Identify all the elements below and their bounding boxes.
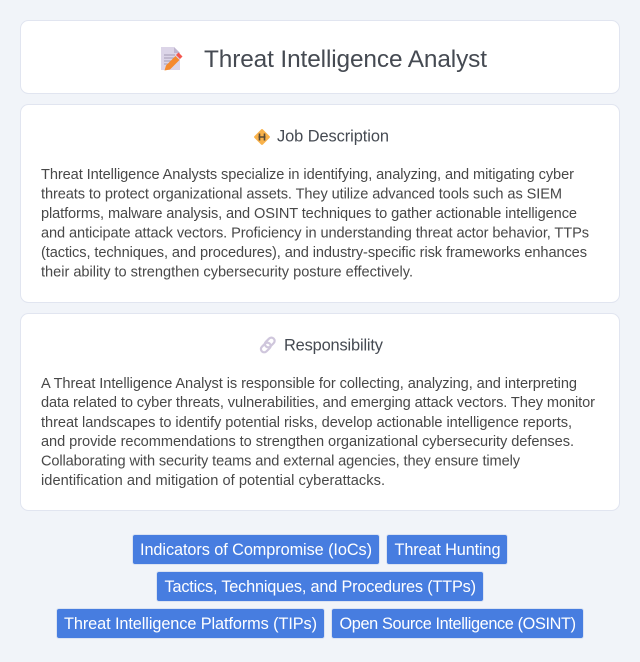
panel: job description: [20, 104, 620, 302]
text block: job description: (tactics, techniques, and procedures), and industry-specific risk frameworks enhances: [41, 245, 587, 261]
panel: header: [20, 20, 620, 94]
tag: threat hunting: [386, 534, 508, 564]
text block: job description: [41, 167, 589, 280]
tag: threat intelligence platforms: Threat Intelligence Platforms (TIPs): [64, 615, 317, 633]
tag: open source intelligence: [332, 608, 584, 638]
text block: job description: their ability to strengthen cybersecurity posture effectively.: [41, 264, 413, 280]
heading: job description: Job Description: [277, 128, 389, 146]
tag: tactics, techniques, and procedures: Tactics, Techniques, and Procedures (TTPs): [164, 578, 476, 596]
tag list: [56, 534, 584, 638]
text block: responsibility: threat landscapes to identify potential risks, develop actionable intelligence reports,: [41, 415, 572, 431]
tag: open source intelligence: Open Source Intelligence (OSINT): [340, 615, 576, 633]
text block: responsibility: Collaborating with security teams and external agencies, they ensure timely: [41, 454, 521, 470]
icon: chain link: [260, 336, 276, 354]
tag: tactics, techniques, and procedures: [156, 572, 484, 602]
icon: document with pencil: [161, 47, 182, 70]
tag: indicators of compromise: Indicators of Compromise (IoCs): [140, 541, 372, 559]
text block: responsibility: [41, 376, 595, 489]
text block: job description: Threat Intelligence Analysts specialize in identifying, analyzing, and mitigating cyber: [41, 167, 574, 183]
tag: indicators of compromise: [132, 534, 380, 564]
text block: responsibility: data related to cyber threats, vulnerabilities, and emerging attack vectors. They monitor: [41, 395, 595, 411]
text block: responsibility: A Threat Intelligence Analyst is responsible for collecting, analyzing, and interpreting: [41, 376, 577, 392]
text block: job description: platforms, malware analysis, and OSINT techniques to gather actionable intelligence: [41, 206, 577, 222]
heading: responsibility: Responsibility: [284, 336, 384, 354]
tag: threat intelligence platforms: [56, 608, 324, 638]
panel: responsibility: [20, 314, 620, 510]
text block: responsibility: and provide recommendations to strengthen organizational cybersecurity defenses.: [41, 434, 574, 450]
tag: threat hunting: Threat Hunting: [394, 541, 500, 559]
text block: responsibility: identification and mitigation of potential cyberattacks.: [41, 473, 385, 489]
text block: job description: and anticipate attack vectors. Proficiency in understanding threat actor behavior, TTPs: [41, 226, 589, 242]
icon: road sign diamond: [254, 129, 270, 145]
text block: job description: threats to protect organizational assets. They utilize advanced tools such as SIEM: [41, 186, 562, 202]
title: Threat Intelligence Analyst: [204, 46, 487, 73]
